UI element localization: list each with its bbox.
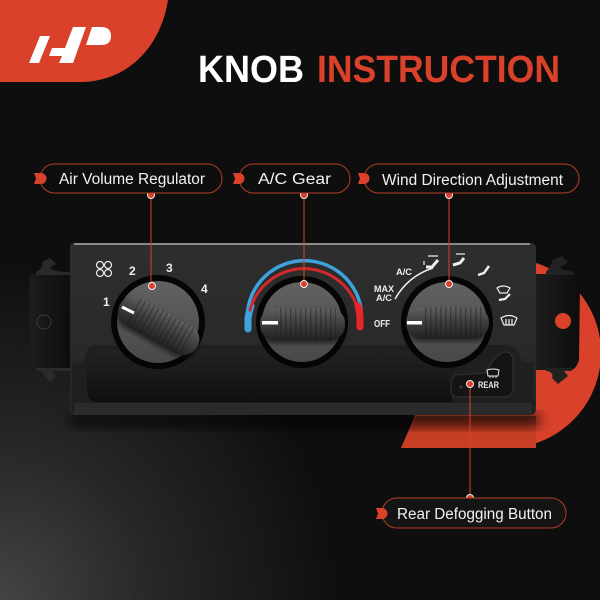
panel body [70,243,536,415]
title: KNOB [198,49,304,91]
red accent shape behind product [401,258,600,448]
logo badge [0,0,168,82]
fan speed labels: 1 [103,295,110,309]
red accent lower band [401,416,536,448]
label: air volume regulator: Air Volume Regulator [59,171,205,188]
label: rear defogging button [376,498,566,528]
fan speed labels: 4 [201,282,208,296]
air direction labels: A/C [396,267,412,278]
title [198,49,560,91]
icon: vents [424,254,517,325]
lower recess [72,345,534,413]
red corner [0,0,168,82]
label: wind direction adjustment [358,164,579,193]
fan speed labels: 3 [166,261,173,275]
air direction labels: A/C [376,293,392,304]
knob: A/C gear [256,276,348,368]
dark long button [87,350,488,402]
label: wind direction adjustment: Wind Direction Adjustment [382,172,564,189]
label: air volume regulator [34,164,222,193]
knob: air volume [111,275,205,369]
label: rear defogging button: Rear Defogging Button [397,506,552,523]
fan speed labels [96,261,208,309]
air direction labels: MAX [374,284,395,295]
knob: wind direction [401,276,493,368]
title: INSTRUCTION [317,49,560,91]
air direction labels [374,254,517,330]
rear defog button: REAR [478,380,499,390]
connector: air volume [148,192,156,290]
control panel [70,243,536,415]
icon: fan [96,262,112,276]
connector: wind direction [446,192,452,288]
connector: rear defogging [466,380,474,502]
rear defog button [451,352,513,397]
label: A/C gear [233,164,350,193]
label: A/C gear: A/C Gear [258,171,331,188]
fan speed labels: 2 [129,264,136,278]
connector: A/C gear [300,192,308,288]
right mounting bracket [536,256,580,384]
left mounting bracket [29,258,70,382]
air direction labels: OFF [374,319,390,330]
logo mark [29,27,111,63]
panel shadow [70,412,540,428]
temperature arcs [247,261,361,329]
